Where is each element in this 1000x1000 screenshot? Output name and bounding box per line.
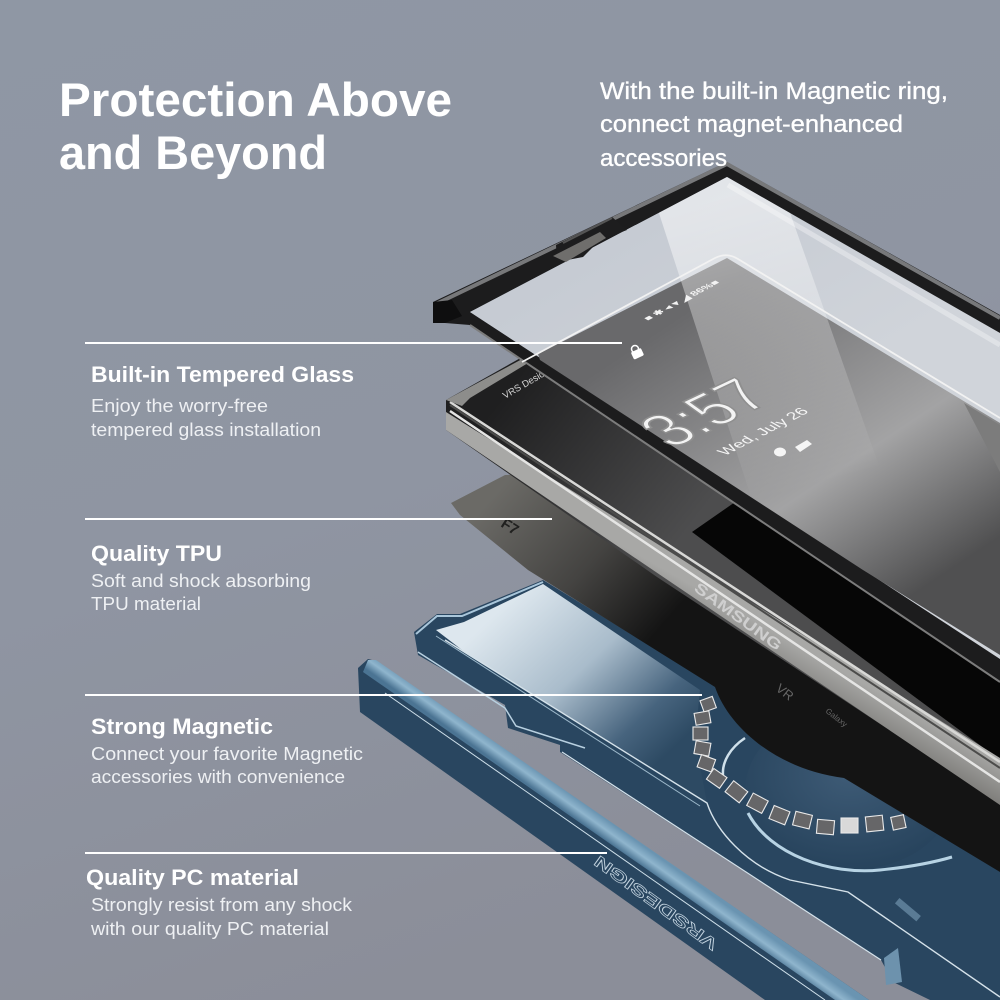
callout: tempered glass	[85, 342, 622, 440]
earpiece notch	[556, 217, 627, 262]
engraved brand on bar: VRSDESIGN	[592, 852, 721, 953]
black TPU layer	[451, 470, 1000, 872]
callout: tempered glass: Built-in Tempered Glass	[91, 362, 354, 387]
light inner plate	[436, 584, 707, 803]
callout: PC material	[85, 852, 607, 939]
callout: magnetic: accessories with convenience	[91, 767, 345, 787]
dark wedge at screen edge	[964, 403, 1000, 472]
callout: TPU	[85, 518, 552, 614]
lock icon	[631, 346, 644, 360]
locking tabs	[895, 898, 921, 921]
callout: magnetic: Connect your favorite Magnetic	[91, 744, 363, 764]
status bar: ■ ✱ ◂ ▾ ◢ 86%■	[641, 279, 722, 322]
screen outline	[522, 255, 1000, 418]
engraved text on TPU: Galaxy	[824, 706, 849, 729]
hinge corner	[433, 300, 462, 323]
frame highlight	[436, 164, 1000, 318]
phone lock screen under glass	[538, 258, 1000, 655]
clock: 3:57	[623, 368, 786, 456]
callout: PC material: Quality PC material	[86, 865, 299, 890]
title: Protection Above	[59, 73, 452, 126]
callout: tempered glass: tempered glass installation	[91, 420, 321, 440]
date: Wed, July 26	[714, 405, 813, 458]
intro text: With the built-in Magnetic ring,	[600, 78, 948, 105]
light reflection beam	[659, 177, 862, 458]
callout: magnetic: Strong Magnetic	[91, 714, 273, 739]
title: and Beyond	[59, 126, 327, 179]
callout: TPU: Quality TPU	[91, 541, 222, 566]
callout: PC material: with our quality PC material	[90, 919, 329, 939]
rail lines	[445, 640, 1000, 997]
engraved text on TPU: VR	[773, 681, 797, 703]
callout: TPU: Soft and shock absorbing	[91, 571, 311, 591]
intro text: connect magnet-enhanced	[600, 111, 903, 138]
engraved text on TPU: F7	[498, 515, 522, 539]
magnet disc	[745, 710, 955, 870]
notification icons	[774, 440, 812, 456]
intro text	[600, 78, 948, 172]
title	[59, 73, 452, 179]
blue PC case back	[414, 580, 1000, 1000]
screen wallpaper label: VRS Desic	[501, 369, 546, 402]
intro text: accessories	[600, 145, 727, 172]
titanium grey frame with dark screen	[446, 356, 1000, 805]
engraved text on TPU	[498, 515, 849, 729]
callout: magnetic	[85, 694, 702, 787]
callout: TPU: TPU material	[91, 594, 201, 614]
magnet ring	[693, 696, 906, 835]
blue PC side bar	[358, 659, 869, 1000]
SAMSUNG logo: SAMSUNG	[691, 579, 785, 654]
tempered glass with dark frame	[433, 162, 1000, 682]
callout: PC material: Strongly resist from any shock	[91, 895, 353, 915]
callout: tempered glass: Enjoy the worry-free	[91, 396, 268, 416]
